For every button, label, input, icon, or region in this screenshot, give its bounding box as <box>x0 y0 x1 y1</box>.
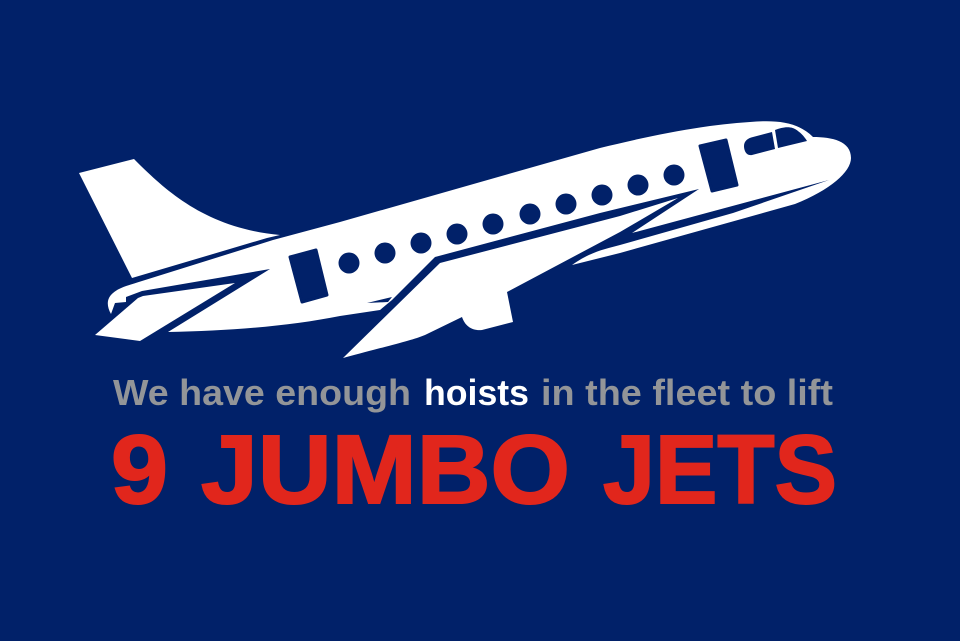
subheading: in the fleet to lift <box>541 372 833 413</box>
front door <box>700 140 737 191</box>
cockpit windows <box>744 127 807 155</box>
cabin windows <box>338 164 684 274</box>
wing <box>343 198 678 358</box>
horizontal stabilizer <box>95 283 235 341</box>
headline: JETS <box>603 415 837 524</box>
subheading: hoists <box>424 372 529 413</box>
subheading: We have enough <box>113 372 411 413</box>
tail fin <box>79 159 280 278</box>
rear door <box>290 250 327 302</box>
subheading <box>113 372 833 413</box>
headline: JUMBO <box>201 415 570 524</box>
headline <box>111 415 837 524</box>
icon: white jet airplane <box>79 121 851 358</box>
headline: 9 <box>111 415 168 524</box>
fuselage <box>108 121 851 332</box>
dark streak under fuselage <box>367 297 392 303</box>
